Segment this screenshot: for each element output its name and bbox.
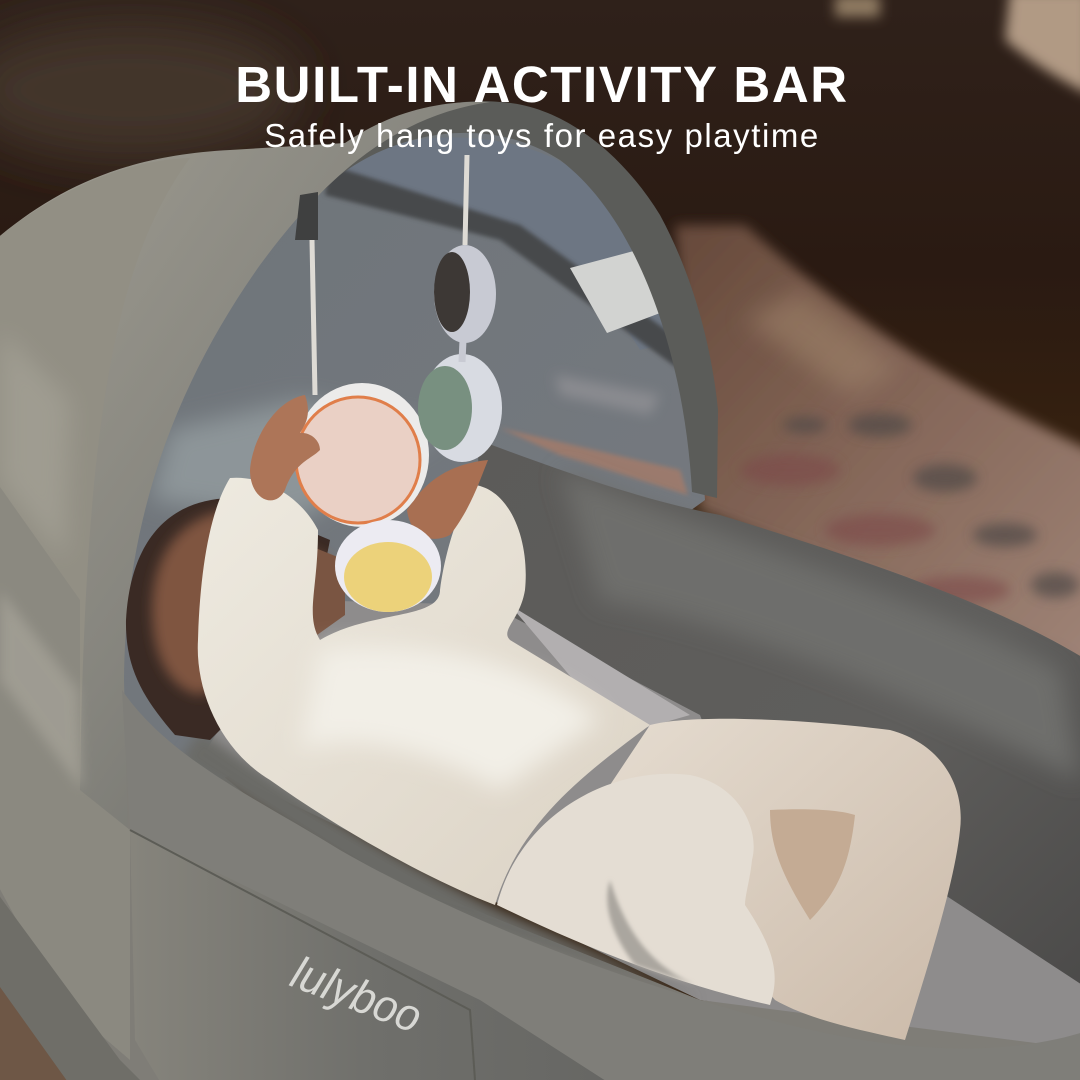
- bassinet front rim: [0, 690, 1080, 1080]
- subtitle: Safely hang toys for easy playtime: [264, 117, 820, 154]
- baby bodysuit: [198, 478, 650, 905]
- baby head: [126, 498, 345, 740]
- canopy rim arch: [330, 101, 718, 498]
- toy straps: [295, 155, 467, 395]
- baby hand: right: [407, 460, 488, 539]
- baby legs: [497, 719, 961, 1040]
- tag label: [570, 248, 668, 333]
- toy: gray oval: [434, 245, 496, 343]
- baby hand: left: [250, 395, 320, 500]
- brand mark: lulyboo: [284, 946, 429, 1043]
- canopy outer fabric: [0, 102, 490, 830]
- bassinet far wall: [478, 440, 1080, 1010]
- toy: teal disc: [418, 354, 502, 462]
- bassinet base fill: [0, 250, 1080, 1080]
- title: BUILT-IN ACTIVITY BAR: [235, 56, 849, 113]
- toy: large pink disc: [295, 383, 429, 527]
- mattress: [180, 600, 1080, 1050]
- canopy inner mesh: [100, 120, 705, 780]
- toy: yellow disc: [335, 520, 441, 612]
- rug corner: [0, 985, 75, 1080]
- rug: [675, 225, 1080, 680]
